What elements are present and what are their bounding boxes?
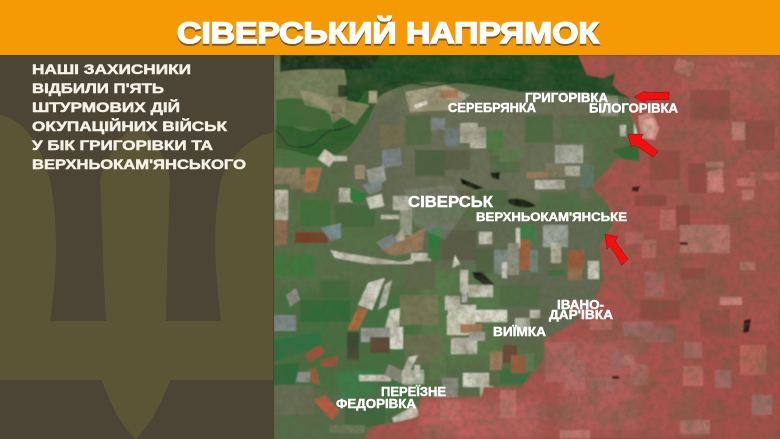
- panel: left text panel with trident: [0, 55, 274, 439]
- text block: summary: ВЕРХНЬОКАМ'ЯНСЬКОГО: [32, 156, 246, 172]
- dark spots: [743, 319, 751, 333]
- map labels: ВЕРХНЬОКАМ'ЯНСЬКЕ: [476, 210, 627, 224]
- water bodies: [508, 198, 536, 208]
- forest north: [344, 55, 629, 116]
- central-south fields: [479, 232, 492, 244]
- text block: summary: ОКУПАЦІЙНИХ ВІЙСЬК: [32, 117, 228, 134]
- map labels: ДАР'ІВКА: [549, 308, 613, 322]
- mosaic of dark hedges and brown plots: [274, 115, 594, 427]
- map labels: ГРИГОРІВКА: [525, 91, 608, 105]
- map labels: ІВАНО-: [557, 298, 604, 312]
- occupied zone: [364, 55, 780, 439]
- tan patches NW: [300, 90, 370, 125]
- title: СІВЕРСЬКИЙ НАПРЯМОК: [177, 16, 600, 50]
- text block: summary: ВІДБИЛИ П'ЯТЬ: [32, 80, 164, 96]
- arrow: towards Hryhorivka: [634, 91, 669, 103]
- text block: summary: У БІК ГРИГОРІВКИ ТА: [32, 137, 213, 153]
- texture: coarse mottling: [274, 55, 780, 439]
- town Siversk: [405, 185, 470, 240]
- map labels: БІЛОГОРІВКА: [589, 102, 678, 116]
- map labels: ПЕРЕЇЗНЕ: [381, 384, 446, 399]
- western fields: [318, 149, 336, 167]
- texture: fine grain: [274, 55, 780, 439]
- icon: trident watermark: [0, 115, 273, 439]
- map labels: СЕРЕБРЯНКА: [448, 101, 536, 115]
- arrow: towards Verkhnokamianske: [605, 234, 628, 265]
- map labels: ФЕДОРІВКА: [336, 397, 416, 411]
- title bar: [0, 0, 780, 55]
- south fields: [358, 278, 385, 310]
- occupied fields: [440, 57, 780, 439]
- map labels: [336, 91, 678, 411]
- map labels: СІВЕРСЬК: [408, 194, 493, 211]
- arrow: towards Bilohorivka: [628, 134, 658, 157]
- fields south-centre: [460, 270, 468, 292]
- free territory base: [274, 55, 674, 439]
- map labels: ВИЇМКА: [493, 324, 546, 339]
- text block: summary: НАШІ ЗАХИСНИКИ: [32, 61, 191, 77]
- text block: summary: [32, 61, 246, 172]
- map: satellite terrain with occupied zone: [274, 55, 780, 439]
- text block: summary: ШТУРМОВИХ ДІЙ: [32, 98, 180, 115]
- fields around centre-north: [431, 118, 445, 130]
